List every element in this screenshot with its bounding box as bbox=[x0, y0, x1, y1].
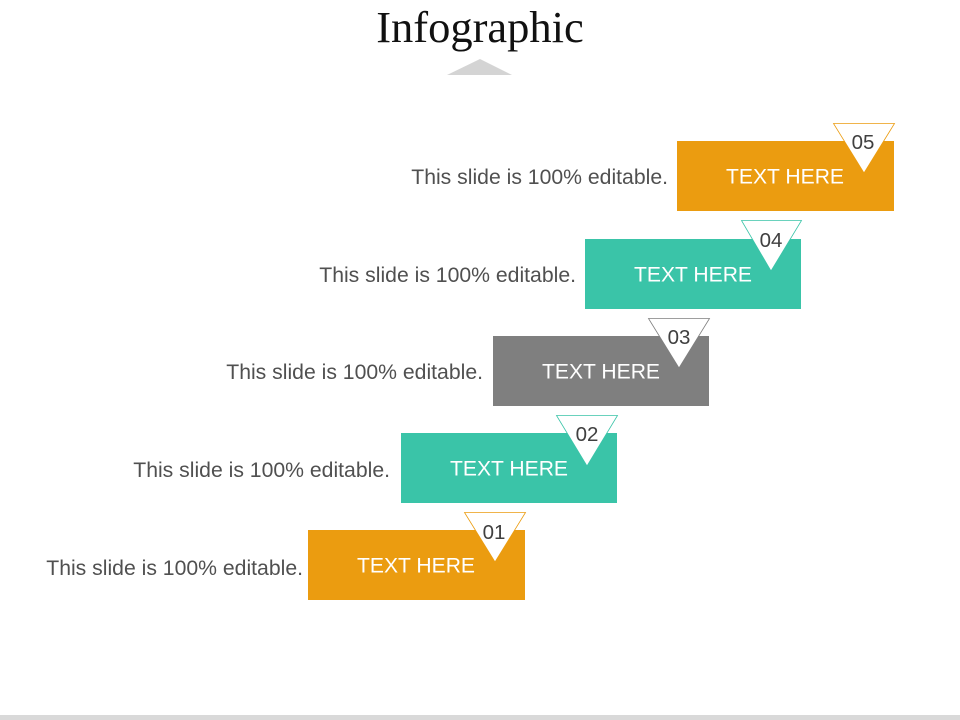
step 01 description: This slide is 100% editable. bbox=[46, 557, 303, 580]
step 03 bar label: TEXT HERE bbox=[542, 360, 660, 384]
step 03 number: 03 bbox=[668, 326, 690, 349]
step 04 description: This slide is 100% editable. bbox=[319, 264, 576, 287]
step 05 bar label: TEXT HERE bbox=[726, 166, 844, 188]
step 04 bbox=[319, 220, 802, 309]
step 05 description: This slide is 100% editable. bbox=[411, 166, 668, 189]
step 02 description: This slide is 100% editable. bbox=[133, 459, 390, 482]
step 05 number: 05 bbox=[852, 131, 874, 154]
step 02 number: 02 bbox=[576, 423, 598, 446]
step 05 bar bbox=[677, 141, 894, 211]
step 01 bbox=[46, 512, 526, 600]
icon: grey title triangle bbox=[447, 59, 512, 75]
step 03 description: This slide is 100% editable. bbox=[226, 361, 483, 384]
step 03 triangle badge bbox=[648, 318, 710, 368]
step 02 bar bbox=[401, 433, 617, 503]
step 01 bar label: TEXT HERE bbox=[357, 554, 475, 578]
step 03 bbox=[226, 318, 710, 406]
step 04 bar bbox=[585, 239, 801, 309]
step 04 triangle badge bbox=[742, 220, 802, 271]
footer bar bbox=[0, 715, 960, 720]
step 04 number: 04 bbox=[760, 229, 782, 252]
title: Infographic bbox=[376, 2, 584, 52]
step 02 bbox=[133, 416, 618, 503]
step 05 triangle badge bbox=[834, 124, 894, 173]
step 04 bar label: TEXT HERE bbox=[634, 264, 752, 286]
step 05 bbox=[411, 124, 894, 211]
step 01 triangle badge bbox=[464, 512, 526, 562]
step 01 number: 01 bbox=[483, 521, 505, 544]
step 02 triangle badge bbox=[556, 416, 618, 466]
step 03 bar bbox=[493, 336, 709, 406]
step 01 bar bbox=[308, 530, 525, 600]
step 02 bar label: TEXT HERE bbox=[450, 458, 568, 480]
